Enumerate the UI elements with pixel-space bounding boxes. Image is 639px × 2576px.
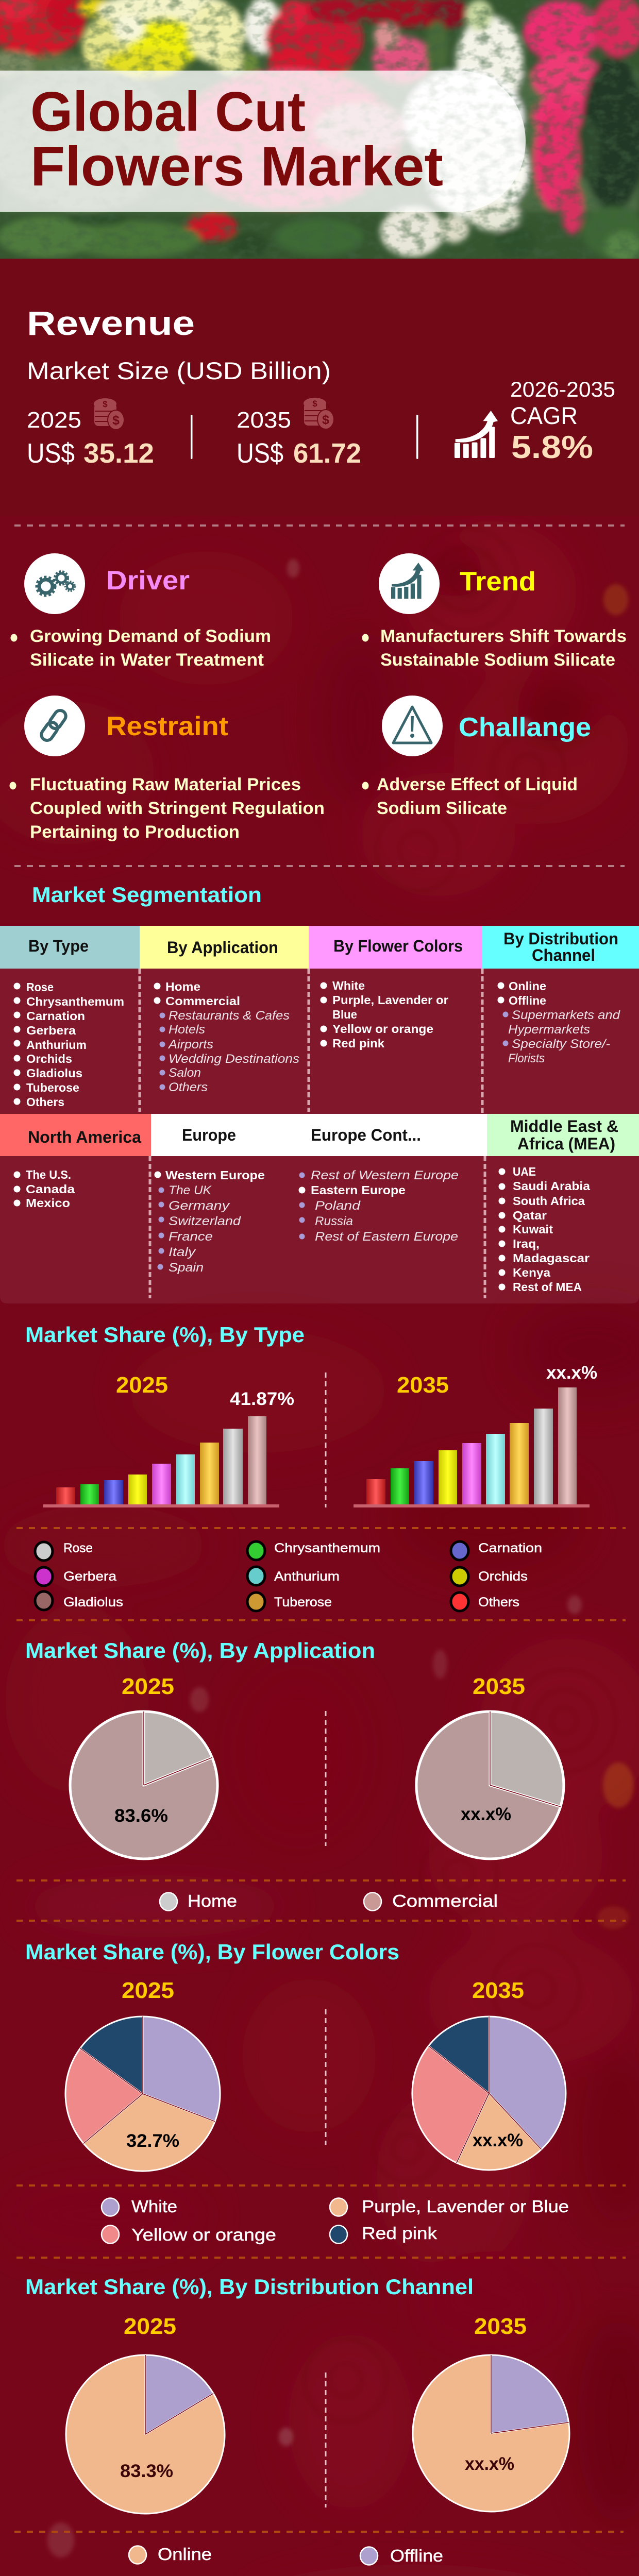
bar chart: 2035 <box>354 1363 597 1507</box>
2025 value: 35.12 <box>83 438 154 469</box>
header: north america <box>0 1114 151 1156</box>
cagr: 5.8% <box>511 430 593 465</box>
pie chart: flower colors 2035: 2035 <box>472 1978 524 2003</box>
panel: driver <box>10 553 271 670</box>
icon: gears <box>24 553 85 614</box>
icon: coins 2025: $ <box>103 399 108 409</box>
challenge text: Sodium Silicate <box>377 799 507 818</box>
pie chart: distribution 2025: 83.3% <box>120 2461 173 2481</box>
panel: trend <box>362 553 627 670</box>
header: middle east and africa <box>487 1114 639 1156</box>
challenge heading: Challange <box>459 713 591 742</box>
legend: type: Chrysanthemum <box>274 1541 380 1555</box>
panel: revenue <box>0 259 639 516</box>
pie chart: application 2025: 2025 <box>122 1674 174 1699</box>
icon: trend arrow <box>379 553 440 614</box>
divider <box>416 415 418 459</box>
driver text: Growing Demand of Sodium <box>30 626 271 646</box>
2025 value: US$ <box>27 438 75 469</box>
legend: type: Orchids <box>478 1569 528 1584</box>
list: by flower colors: Red pink <box>332 1037 384 1050</box>
list: by application: Commercial <box>165 994 240 1008</box>
2035 value: US$ <box>237 438 283 469</box>
pie chart: flower colors 2025: 2025 <box>122 1978 174 2003</box>
trend text <box>362 626 627 670</box>
2025 value: 2025 <box>27 408 81 433</box>
cagr <box>510 377 615 465</box>
list: by type <box>13 980 124 1109</box>
bar chart: 2025: 2025 <box>116 1372 168 1398</box>
list: by distribution channel: Supermarkets and <box>512 1008 620 1022</box>
legend: type: Anthurium <box>274 1569 340 1584</box>
panel: restraint <box>9 696 325 842</box>
list: by application: Wedding Destinations <box>169 1052 299 1066</box>
list: europe: Switzerland <box>169 1214 241 1228</box>
list: by distribution channel <box>498 979 620 1065</box>
header: by application: By Application <box>167 938 278 957</box>
heading: market share by distribution channel: Market Share (%), By Distribution Channel <box>25 2275 474 2299</box>
header: middle east and africa: Africa (MEA) <box>517 1134 615 1153</box>
legend: flower colors: Red pink <box>362 2224 438 2243</box>
list: europe continued: Poland <box>315 1199 361 1213</box>
2025 value <box>27 408 154 469</box>
title: Flowers Market <box>30 135 443 198</box>
list: europe: Germany <box>169 1199 230 1213</box>
legend: type: Tuberose <box>274 1595 332 1609</box>
list: by flower colors: Yellow or orange <box>332 1022 433 1036</box>
pie chart: distribution 2035 <box>413 2314 569 2512</box>
list: by distribution channel: Florists <box>508 1052 545 1065</box>
list: north america: The U.S. <box>26 1168 71 1181</box>
hero photo: flowers <box>0 0 639 263</box>
list: by application: Airports <box>167 1038 213 1052</box>
cagr: CAGR <box>510 402 578 429</box>
list: by type: Carnation <box>26 1009 85 1023</box>
list: by flower colors: White <box>332 979 365 992</box>
list: middle east and africa: Kuwait <box>513 1223 553 1236</box>
2035 value <box>237 408 361 469</box>
legend: type: Others <box>478 1595 519 1609</box>
header: by type <box>0 926 140 969</box>
list: europe continued: Eastern Europe <box>311 1183 406 1197</box>
header: by distribution channel: Channel <box>532 946 595 964</box>
list: europe: Spain <box>169 1261 204 1275</box>
list: by type: Gerbera <box>26 1024 76 1037</box>
legend: distribution channel: Online <box>158 2545 212 2564</box>
list: by flower colors <box>321 979 448 1050</box>
list: by type: Orchids <box>26 1052 72 1065</box>
legend: type <box>35 1541 542 1611</box>
list: middle east and africa: Qatar <box>513 1209 547 1222</box>
pie chart: flower colors 2035 <box>412 1978 566 2170</box>
icon: coins 2035 <box>304 398 334 430</box>
2035 value: 61.72 <box>293 438 361 469</box>
legend: type: Gerbera <box>63 1569 116 1584</box>
header: by distribution channel <box>482 926 639 969</box>
revenue heading: Revenue <box>27 304 195 342</box>
list: by flower colors: Purple, Lavender or <box>332 993 448 1007</box>
icon: growth arrow <box>455 411 498 458</box>
list: by distribution channel: Online <box>509 979 546 993</box>
list: by distribution channel: Specialty Store/- <box>512 1037 610 1051</box>
header: by type: By Type <box>28 937 89 955</box>
icon: coins 2035: $ <box>322 413 329 427</box>
list: middle east and africa: UAE <box>513 1165 536 1178</box>
list: by distribution channel: Offline <box>509 994 546 1007</box>
legend: flower colors <box>102 2197 569 2244</box>
heading: market share by application: Market Share (%), By Application <box>25 1638 375 1663</box>
trend text: Sustainable Sodium Silicate <box>380 650 615 670</box>
pie chart: application 2025: 83.6% <box>114 1806 168 1826</box>
list: by application: Others <box>169 1080 208 1094</box>
legend: type: Rose <box>63 1541 93 1555</box>
list: by type: Others <box>26 1095 64 1109</box>
list: by application <box>154 980 299 1094</box>
divider <box>191 415 193 459</box>
pie chart: application 2035: 2035 <box>473 1674 525 1699</box>
legend: flower colors: Purple, Lavender or Blue <box>362 2197 569 2216</box>
pie chart: flower colors 2035: xx.x% <box>473 2130 523 2150</box>
pie chart: flower colors 2025: 32.7% <box>126 2131 179 2151</box>
header: europe <box>151 1114 487 1156</box>
list: middle east and africa: South Africa <box>513 1194 585 1208</box>
list: by application: Home <box>165 980 200 993</box>
legend: flower colors: White <box>131 2197 177 2216</box>
bar chart: 2025 <box>43 1372 294 1507</box>
icon: coins 2025: $ <box>112 413 120 428</box>
icon: warning triangle <box>382 696 443 756</box>
challenge text: Adverse Effect of Liquid <box>377 775 578 794</box>
pie chart: application 2025 <box>70 1674 217 1859</box>
pie chart: distribution 2035: 2035 <box>474 2314 527 2339</box>
list: by type: Chrysanthemum <box>26 995 124 1008</box>
trend text: Manufacturers Shift Towards <box>380 626 627 646</box>
legend: type: Carnation <box>478 1541 542 1555</box>
list: by flower colors: Blue <box>332 1008 357 1021</box>
icon: coins 2035: $ <box>312 399 317 409</box>
legend: distribution channel: Offline <box>390 2546 443 2565</box>
list: by application: Restaurants & Cafes <box>169 1009 290 1023</box>
list: middle east and africa: Madagascar <box>513 1251 590 1265</box>
legend: application <box>160 1891 498 1910</box>
heading: market share by type: Market Share (%), By Type <box>25 1323 305 1347</box>
legend: flower colors: Yellow or orange <box>131 2225 276 2244</box>
legend: application: Home <box>188 1891 237 1910</box>
list: north america <box>13 1168 75 1210</box>
icon: coins 2025 <box>94 398 125 430</box>
list: europe continued: Rest of Western Europe <box>311 1168 459 1182</box>
header: europe: Europe Cont... <box>311 1126 421 1144</box>
list: europe: The UK <box>169 1183 212 1197</box>
list: europe continued <box>299 1168 459 1244</box>
heading: market share by flower colors: Market Share (%), By Flower Colors <box>25 1940 399 1964</box>
panel: segmentation table <box>0 926 639 1303</box>
list: europe <box>155 1168 265 1275</box>
driver text: Silicate in Water Treatment <box>30 650 264 670</box>
list: europe: Italy <box>169 1245 196 1259</box>
title <box>30 80 443 198</box>
list: middle east and africa: Saudi Arabia <box>513 1179 590 1193</box>
list: middle east and africa: Iraq, <box>513 1237 540 1250</box>
list: by application: Hotels <box>169 1023 205 1037</box>
bar chart: 2035: xx.x% <box>546 1363 597 1383</box>
list: middle east and africa <box>499 1165 590 1294</box>
header: middle east and africa: Middle East & <box>510 1117 618 1136</box>
list: by distribution channel: Hypermarkets <box>508 1023 590 1037</box>
header: by application <box>140 926 309 969</box>
legend: type: Gladiolus <box>63 1595 123 1609</box>
header: by flower colors: By Flower Colors <box>333 937 463 955</box>
panel: challenge <box>362 696 591 818</box>
title band <box>0 71 526 212</box>
restraint text: Fluctuating Raw Material Prices <box>30 775 301 794</box>
list: europe continued: Rest of Eastern Europe <box>315 1230 458 1244</box>
rose background <box>0 516 639 2576</box>
bar chart: 2025: 41.87% <box>230 1389 294 1409</box>
header: by flower colors <box>309 926 482 969</box>
pie chart: distribution 2025: 2025 <box>124 2314 176 2339</box>
list: north america: Canada <box>26 1182 75 1196</box>
restraint text: Pertaining to Production <box>30 822 240 842</box>
restraint heading: Restraint <box>106 711 228 741</box>
heading: market segmentation: Market Segmentation <box>32 883 262 907</box>
list: by application: Salon <box>169 1066 201 1080</box>
header: north america: North America <box>28 1128 141 1146</box>
list: by type: Anthurium <box>26 1038 87 1052</box>
header: by distribution channel: By Distribution <box>503 929 618 948</box>
pie chart: distribution 2035: xx.x% <box>465 2454 514 2474</box>
pie chart: flower colors 2025 <box>65 1978 220 2171</box>
list: europe: Western Europe <box>165 1168 265 1182</box>
header: europe: Europe <box>182 1126 236 1144</box>
legend: application: Commercial <box>392 1891 498 1910</box>
challenge text <box>362 775 578 818</box>
restraint text <box>9 775 325 842</box>
market size label: Market Size (USD Billion) <box>27 357 331 384</box>
trend heading: Trend <box>460 567 536 597</box>
icon: chain link <box>24 696 85 756</box>
list: middle east and africa: Kenya <box>513 1266 550 1279</box>
driver heading: Driver <box>106 566 190 596</box>
list: middle east and africa: Rest of MEA <box>513 1280 582 1294</box>
restraint text: Coupled with Stringent Regulation <box>30 799 325 818</box>
legend: distribution channel <box>129 2545 443 2565</box>
list: europe continued: Russia <box>315 1214 353 1228</box>
bar chart: 2035: 2035 <box>397 1372 449 1398</box>
2035 value: 2035 <box>237 408 291 433</box>
list: by type: Rose <box>26 980 54 994</box>
list: by type: Gladiolus <box>26 1066 82 1080</box>
driver text <box>10 626 271 670</box>
list: europe: France <box>169 1230 213 1244</box>
list: by type: Tuberose <box>26 1081 79 1094</box>
cagr: 2026-2035 <box>510 377 615 401</box>
pie chart: application 2035: xx.x% <box>461 1804 511 1824</box>
pie chart: distribution 2025 <box>66 2314 225 2514</box>
list: north america: Mexico <box>26 1196 70 1210</box>
title: Global Cut <box>30 80 306 143</box>
pie chart: application 2035 <box>416 1674 564 1859</box>
